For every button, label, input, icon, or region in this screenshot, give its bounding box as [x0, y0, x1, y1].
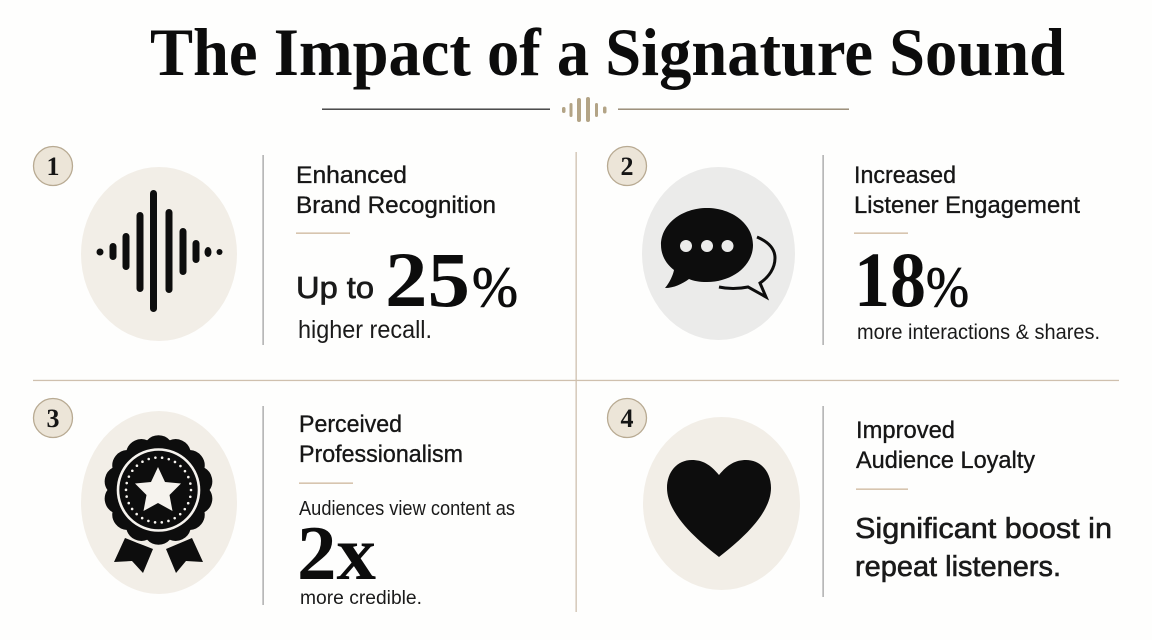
statistic: 18% [854, 236, 969, 323]
accent rule [854, 232, 908, 234]
statistic: 18%: 18 [854, 236, 926, 323]
vertical rule [822, 406, 824, 597]
number badge 3: 3 [46, 404, 60, 433]
panel: audience loyalty [608, 398, 1112, 597]
number badge 1 [34, 146, 72, 186]
number badge 2 [608, 146, 646, 186]
heading: Audience Loyalty [856, 447, 1035, 474]
heading: Perceived [299, 411, 402, 438]
statistic: up to 25% [296, 236, 518, 323]
vertical rule [822, 155, 824, 345]
number badge 2: 2 [620, 152, 634, 181]
statement: Significant boost in [855, 513, 1112, 545]
caption: more credible. [300, 588, 422, 609]
number badge 4: 4 [620, 404, 634, 433]
statistic: 18%: % [926, 256, 969, 319]
statement: repeat listeners. [855, 551, 1061, 583]
heading [856, 417, 1035, 474]
heading: Professionalism [299, 441, 463, 468]
title divider with waveform ornament [322, 97, 849, 122]
panel: listener engagement [608, 146, 1100, 345]
heading [299, 411, 463, 468]
icon: speech bubbles [642, 167, 795, 340]
panel: perceived professionalism [34, 398, 515, 609]
icon: award rosette [81, 411, 237, 594]
heading: Listener Engagement [854, 192, 1080, 219]
statistic: up to 25%: 25 [385, 236, 470, 323]
heading: Improved [856, 417, 955, 444]
number badge 4 [608, 398, 646, 438]
caption: more interactions & shares. [857, 321, 1100, 344]
accent rule [299, 482, 353, 484]
accent rule [296, 232, 350, 234]
icon: heart [643, 417, 800, 590]
number badge 3 [34, 398, 72, 438]
number badge 1: 1 [46, 152, 60, 181]
statement lead-in: Audiences view content as [299, 498, 515, 520]
vertical rule [262, 155, 264, 345]
grid divider: vertical [576, 152, 577, 612]
vertical rule [262, 406, 264, 605]
heading: Increased [854, 162, 956, 189]
statistic: up to 25%: Up to [296, 270, 374, 305]
heading: Brand Recognition [296, 192, 496, 219]
heading [854, 162, 1080, 219]
statement [855, 513, 1112, 583]
caption: higher recall. [298, 316, 432, 344]
statistic: up to 25%: % [472, 256, 518, 319]
title: The Impact of a Signature Sound [150, 14, 1065, 90]
statistic: 2x: 2x [297, 510, 377, 596]
panel: brand recognition [34, 146, 518, 345]
icon: sound wave [81, 167, 237, 341]
heading [296, 162, 496, 219]
heading: Enhanced [296, 162, 407, 189]
accent rule [856, 488, 908, 490]
grid divider: horizontal [33, 380, 1119, 381]
